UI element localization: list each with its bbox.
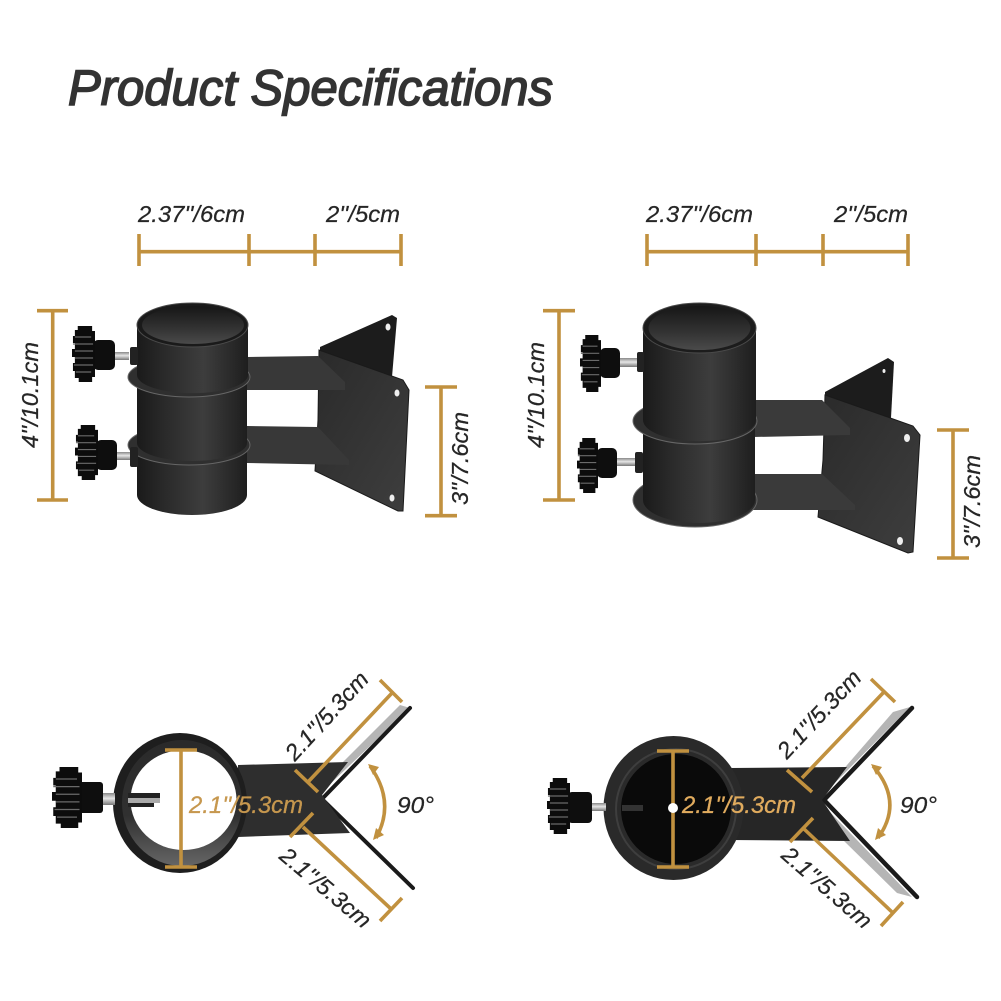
plate height dimension 3 inch: 3''/7.6cm: [447, 412, 473, 505]
cylinder clamp: [633, 303, 757, 527]
panel: top view bracket left: [52, 666, 434, 933]
lower side dimension: [776, 818, 903, 934]
top width dimension: [645, 201, 908, 266]
arm: [730, 767, 850, 841]
clamp disk: [604, 736, 744, 880]
knob and screw: [52, 767, 160, 828]
mounting plates: [315, 315, 409, 511]
lower side dimension: 2.1''/5.3cm: [274, 841, 377, 933]
top width dimension: 2.37''/6cm: [137, 201, 245, 227]
top width dimension: 2''/5cm: [325, 201, 400, 227]
top width dimension: 2.37''/6cm: [645, 201, 753, 227]
height dimension 4 inch: [17, 311, 68, 500]
height dimension 4 inch: [523, 311, 575, 500]
height dimension 4 inch: 4''/10.1cm: [17, 342, 43, 448]
support arms: [247, 356, 349, 465]
plate height dimension 3 inch: 3''/7.6cm: [959, 455, 985, 548]
top width dimension: 2''/5cm: [833, 201, 908, 227]
inner diameter dimension: 2.1''/5.3cm: [681, 792, 796, 819]
knob upper: [72, 326, 138, 382]
plate height dimension 3 inch: [937, 430, 985, 558]
top width dimension: [137, 201, 401, 266]
angle arrow: [871, 764, 937, 840]
lower side dimension: [274, 813, 402, 933]
height dimension 4 inch: 4''/10.1cm: [523, 342, 549, 448]
V plates: [824, 707, 917, 897]
knob lower: [75, 425, 138, 480]
angle arrow: 90°: [900, 792, 937, 818]
V plates: [322, 705, 413, 888]
inner diameter dimension: [657, 751, 796, 867]
panel: front view bracket right: [523, 201, 985, 558]
title: Product Specifications: [68, 60, 553, 116]
support arms: [750, 400, 855, 510]
knob and screw: [547, 778, 606, 834]
upper side dimension: 2.1''/5.3cm: [771, 664, 866, 764]
angle arrow: 90°: [397, 792, 434, 818]
panel: front view bracket left: [17, 201, 473, 516]
angle arrow: [368, 764, 434, 840]
clamp ring: [113, 733, 247, 873]
knob lower: [577, 438, 643, 493]
upper side dimension: [279, 666, 402, 792]
plate height dimension 3 inch: [425, 387, 473, 516]
inner diameter dimension: [165, 750, 303, 867]
cylinder clamp: [128, 303, 250, 515]
inner diameter dimension: 2.1''/5.3cm: [188, 792, 303, 819]
upper side dimension: [771, 664, 895, 792]
upper side dimension: 2.1''/5.3cm: [279, 666, 374, 766]
knob upper: [580, 335, 644, 392]
lower side dimension: 2.1''/5.3cm: [776, 840, 878, 934]
panel: top view bracket right: [547, 664, 937, 934]
mounting plates: [818, 358, 920, 553]
arm: [238, 762, 350, 837]
